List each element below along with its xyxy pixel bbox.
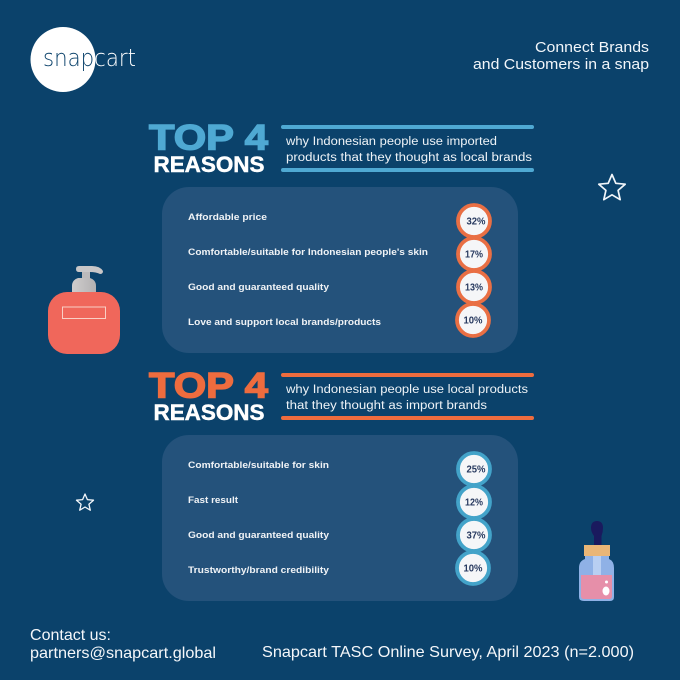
heading: top 4 reasons imported: TOP 4 bbox=[149, 118, 269, 158]
reason labels: Love and support local brands/products bbox=[188, 317, 381, 328]
percentage badges: 37% bbox=[466, 530, 486, 542]
reason labels: Good and guaranteed quality bbox=[188, 282, 330, 293]
contact information: Contact us: bbox=[30, 627, 111, 644]
icon: large star bbox=[599, 174, 625, 200]
heading: top 4 reasons imported bbox=[149, 118, 269, 177]
icon: pump bottle bbox=[48, 266, 120, 354]
reason labels: Trustworthy/brand credibility bbox=[188, 565, 330, 576]
subheading: local products thought import bbox=[281, 373, 534, 420]
icon: small star bbox=[76, 494, 94, 510]
subheading: imported products thought local: products that they thought as local brands bbox=[286, 152, 532, 164]
contact information: partners@snapcart.global bbox=[30, 645, 216, 662]
subheading: local products thought import: why Indonesian people use local products bbox=[285, 384, 528, 396]
percentage badges: 13% bbox=[465, 282, 483, 294]
percentage badges: 25% bbox=[466, 464, 486, 476]
percentage badges: 17% bbox=[465, 250, 483, 260]
subheading: local products thought import: that they thought as import brands bbox=[286, 400, 487, 412]
panel: imported reasons bbox=[162, 187, 518, 353]
reason labels: Comfortable/suitable for skin bbox=[188, 460, 329, 471]
tagline: Connect Brands bbox=[535, 39, 649, 56]
percentage badges bbox=[457, 453, 490, 584]
heading: top 4 reasons imported: REASONS bbox=[154, 152, 264, 177]
percentage badges bbox=[457, 205, 490, 336]
reason labels bbox=[188, 460, 330, 576]
percentage badges: 12% bbox=[465, 498, 483, 508]
icon: dropper bottle bbox=[579, 521, 614, 601]
logo: snapcart bbox=[30, 27, 136, 92]
reason labels: Good and guaranteed quality bbox=[188, 530, 330, 541]
reason labels: Affordable price bbox=[188, 212, 267, 223]
tagline: and Customers in a snap bbox=[473, 56, 649, 73]
reason labels: Comfortable/suitable for Indonesian people's skin bbox=[188, 247, 428, 258]
percentage badges: 32% bbox=[466, 216, 486, 228]
contact information bbox=[30, 627, 216, 662]
panel: local reasons bbox=[162, 435, 518, 601]
heading: top 4 reasons local bbox=[149, 366, 269, 425]
survey source: Snapcart TASC Online Survey, April 2023 (n=2.000) bbox=[262, 644, 634, 661]
subheading: imported products thought local: why Indonesian people use imported bbox=[285, 136, 497, 148]
heading: top 4 reasons local: TOP 4 bbox=[149, 366, 269, 406]
percentage badges: 10% bbox=[464, 564, 483, 574]
percentage badges: 10% bbox=[464, 316, 483, 326]
reason labels bbox=[188, 212, 428, 328]
reason labels: Fast result bbox=[188, 495, 239, 506]
subheading: imported products thought local bbox=[281, 125, 534, 172]
tagline bbox=[473, 39, 649, 73]
logo: snapcart: snapcart bbox=[43, 44, 136, 72]
heading: top 4 reasons local: REASONS bbox=[154, 400, 264, 425]
